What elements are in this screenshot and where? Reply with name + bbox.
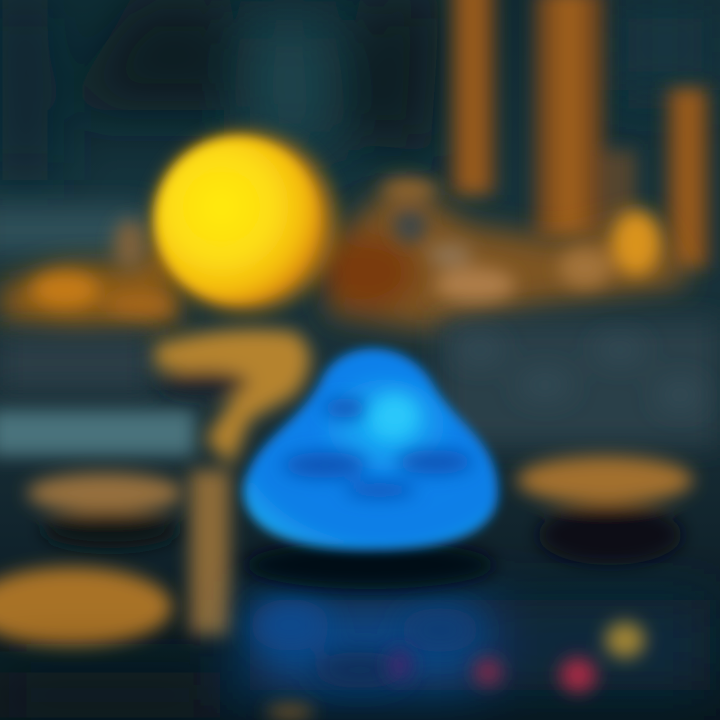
- yellow glowing sphere: [152, 132, 336, 312]
- reflection mottling: [250, 599, 480, 688]
- mottled speckles on grey texture: [458, 338, 702, 409]
- small coloured lights: [266, 622, 645, 720]
- blue glowing dome: [243, 348, 498, 550]
- dome dark streaks: [283, 398, 473, 498]
- orange towers: [450, 0, 710, 268]
- dark base under blue dome: [245, 541, 495, 589]
- blue base reflection: [0, 600, 710, 720]
- dark upper shapes: [0, 0, 720, 180]
- ridge highlights: [31, 180, 660, 316]
- left lower disc: [27, 473, 183, 548]
- bottom-left golden disc: [0, 567, 172, 647]
- golden curved path: [155, 329, 310, 635]
- golden ridge band: [0, 180, 690, 330]
- teal left shelf: [0, 410, 195, 456]
- grey haze behind horizon: [0, 205, 150, 255]
- dome highlight: [371, 394, 419, 438]
- right disc: [517, 456, 693, 565]
- grey mid-right texture: [0, 320, 720, 445]
